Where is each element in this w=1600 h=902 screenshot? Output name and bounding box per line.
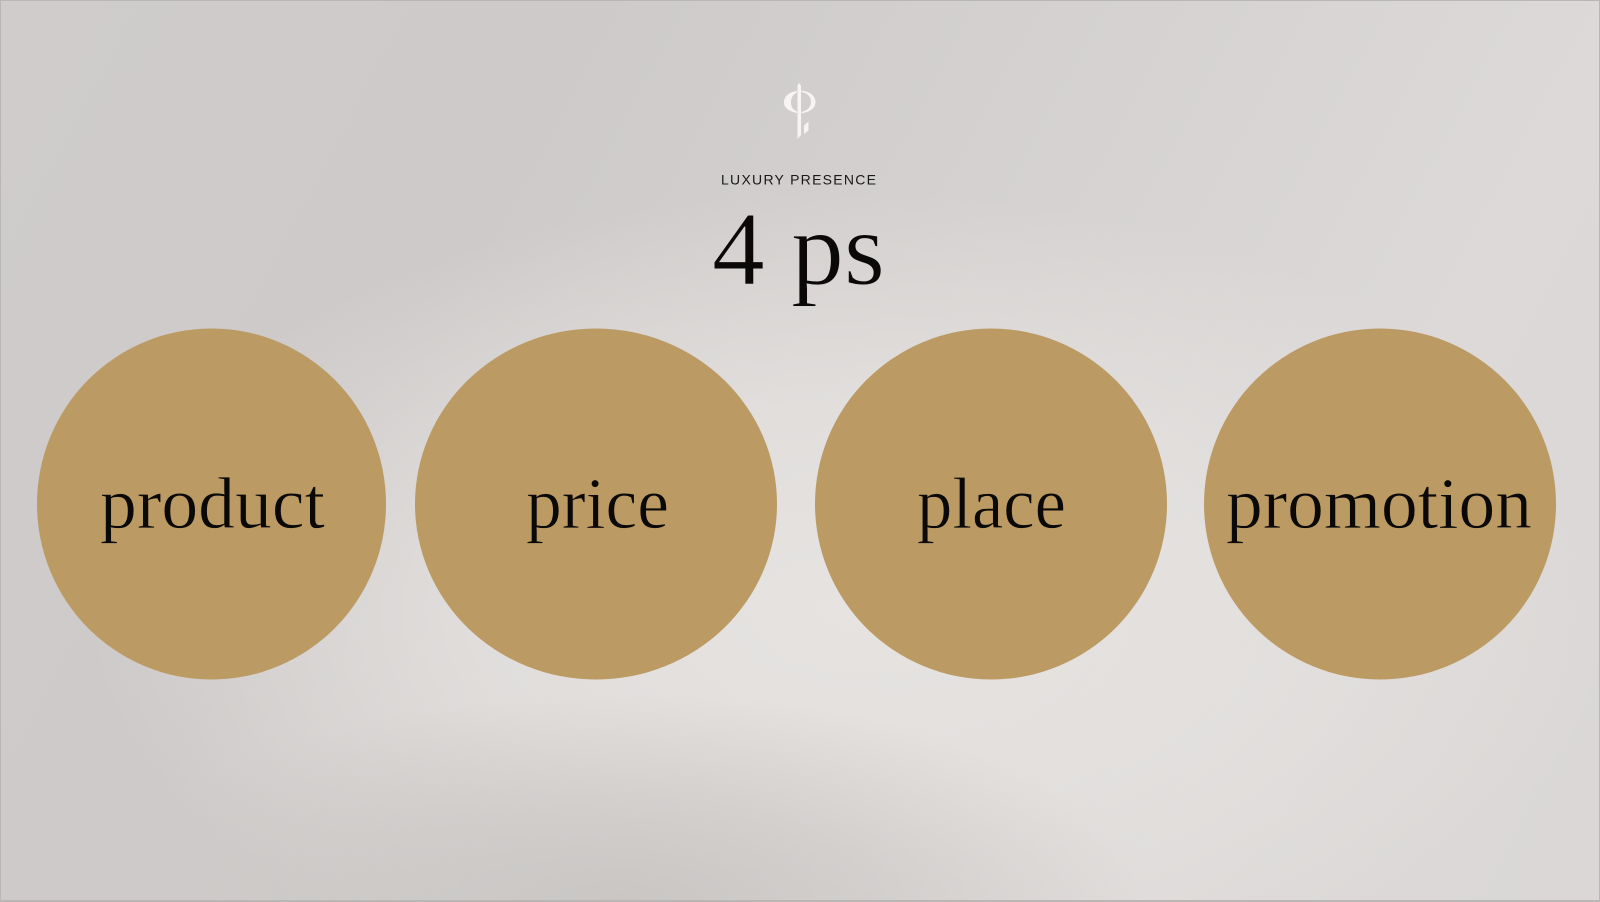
- circle: product: [37, 328, 386, 680]
- circle: price: price: [526, 463, 669, 544]
- circle: promotion: [1204, 328, 1556, 680]
- icon: luxury presence logo: [784, 83, 816, 139]
- circle: price: [415, 328, 777, 680]
- brand label: LUXURY PRESENCE: [721, 172, 876, 188]
- circle: place: place: [917, 463, 1066, 544]
- circle: product: product: [100, 463, 325, 544]
- title: 4 ps: [712, 190, 885, 307]
- circle: place: [815, 328, 1167, 680]
- circle: promotion: promotion: [1226, 463, 1532, 544]
